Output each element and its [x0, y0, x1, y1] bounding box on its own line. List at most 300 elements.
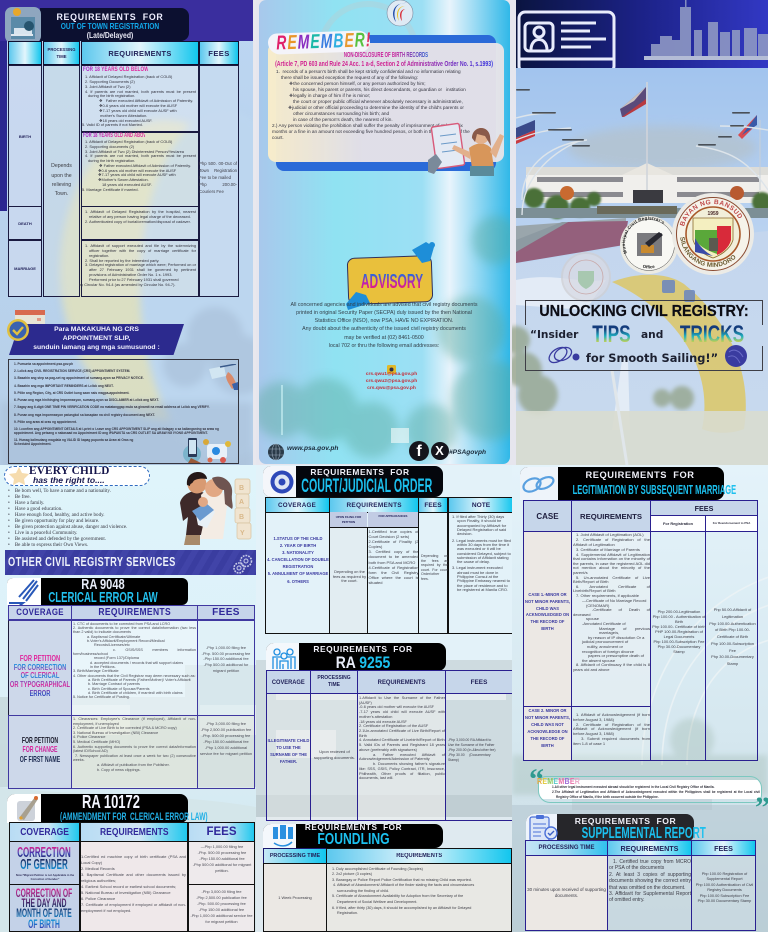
steps text: 11. Huwag kalimutang magdala ng VALID ID kapag pupunta sa Araw at Oras ng: [14, 438, 133, 442]
coverage header: [265, 497, 330, 513]
supplemental header: [526, 814, 694, 842]
panel: out of town registration: [0, 0, 253, 465]
case 2 requirements: 2. Certificate of Registration of the Affidavit of Acknowledgement (if born before August 3, 1988): [573, 722, 650, 736]
correction of gender title: OF GENDER: [20, 857, 68, 873]
case 1 requirements: judicial pronouncement of: [582, 639, 628, 644]
fees text dob: -Php. 500.00 processing fee: [197, 901, 246, 906]
ra 9255 table: [266, 670, 512, 821]
seal: municipal civil registrar office: Office: [642, 264, 654, 268]
remember strip text: 2.The Affidavit of Legitimation and Affidavit of Acknowledgment executed within the Philippines shall be registered at the Local civil Registry Office of Manila, if the birth occurred outside the Philippine.: [552, 790, 760, 799]
petition title first name: OF FIRST NAME: [20, 754, 60, 764]
requirements header: [326, 848, 512, 864]
processing header: [310, 670, 358, 694]
fees text gender: -Php. 500.00 processing fee: [198, 850, 246, 855]
requirements header: [329, 497, 419, 513]
supplemental requirements text: [609, 859, 691, 904]
processing header: PROCESSING TIME: [538, 845, 594, 851]
requirements header: REQUIREMENTS: [346, 502, 402, 508]
coverage header: [9, 822, 80, 842]
banner: appointment slip: [9, 324, 184, 355]
requirements text: 1.Certified ed machine copy of birth certificate (PSA and Local Copy): [81, 854, 186, 865]
text 18 and above: ❖0-6 years old mother will execute the AUSF: [98, 168, 176, 172]
supplemental requirements text: 3. Affidavit for Supplemental Report of omitted entry.: [609, 891, 691, 903]
requirements text clerical: in the Petitions.: [90, 665, 116, 669]
case 1 fees: Php 30.00-Documentary Stamp: [658, 644, 700, 654]
header bar: [40, 8, 189, 41]
text fees: [199, 161, 237, 194]
text fees: Php 200.00-Couriers Fee: [199, 182, 237, 194]
requirements header: REQUIREMENTS: [396, 853, 442, 859]
case 1 requirements: -Certificate of Death of deceased: [573, 607, 650, 617]
foundling requirements text: 6. If filed, after thirty (30) days, it should be accomplished by an Affidavit for Delayed: [332, 906, 471, 910]
tips word: [584, 323, 638, 347]
requirements text first name: 2. Certificate of Live Birth to be corrected (PSA & MCRO copy): [73, 726, 177, 730]
icon: id card: [518, 10, 616, 68]
email addresses: crs.qwu1@psa.gov.ph: [366, 372, 417, 377]
requirements text: 2.1Un-annotated Certificate of Live Birth/Report of Birth: [359, 729, 445, 738]
fees header: FEES: [714, 844, 733, 852]
icon: psa logo: [386, 0, 414, 26]
icon: rope left: [548, 346, 580, 364]
legitimation header: [520, 467, 724, 500]
text under 18: ❖7-17 years old child will execute AUSF with: [99, 108, 177, 113]
appearances subheader: FOR APPEARANCES: [379, 514, 407, 518]
steps text: 5. Piliin ang Region, City, at CRS Outlet kung saan nais magpa-appointment.: [14, 391, 129, 395]
processing header: PROCESSING: [317, 674, 351, 680]
other services title: OTHER CIVIL REGISTRY SERVICES: [8, 555, 176, 569]
correction of gender title: [8, 847, 80, 872]
case 1 requirements: the absent spouse: [582, 658, 615, 663]
fees text first name: -Php 3,000.00 filing fee: [206, 721, 246, 726]
steps text: 1. Pumunta sa appointment.psa.gov.ph: [14, 362, 73, 366]
requirements text: 4. Annotated Certificate of Livebirth/Report of Birth: [359, 738, 445, 742]
illustration: baby blocks: Y: [240, 530, 245, 537]
foundling requirements text: 3. Barangay or Police Report Police Certification that no missing Child was reported.: [332, 878, 472, 882]
banner text: Para MAKAKUHA NG CRS: [54, 326, 139, 333]
requirements text: b. Documents showing father's signature like: SSS, GSIS, Policy Contract, ITR, Insurance, Philhealth, Other proofs of filiation, public documents, last will.: [359, 762, 445, 780]
website: www.psa.gov.ph: [287, 445, 338, 452]
requirements text: a. Father executed Affidavit of Acknowledgement/Admission of Paternity: [359, 753, 445, 761]
processing cell: 1 Week Processing: [278, 895, 312, 900]
steps text: 2. I-click ang CIVIL REGISTRATION SERVICE (CRS) APPOINTMENT SYSTEM.: [14, 369, 130, 373]
requirements text first name: [73, 717, 196, 772]
panel: cover photo: [512, 0, 768, 465]
other services band: [5, 550, 256, 575]
ra 9048 title: RA 9048: [81, 576, 125, 593]
fees header: [188, 822, 255, 842]
note header: [448, 497, 514, 513]
fees dob cell: [188, 884, 255, 932]
body text: other circumstances surrounding his birth; and: [293, 111, 389, 116]
gender note: Note:*Migrant Petition is not Applicable in the Correction of Gender.*: [16, 874, 74, 881]
insider word: “Insider: [530, 329, 578, 341]
correction of dob title: OF BIRTH: [28, 917, 60, 931]
appearances subheader: [368, 512, 418, 527]
processing header: [525, 840, 608, 856]
remember strip text: 1.All other legal instrument executed abroad should be registered in the Local Civil Registry Office of Manila.: [552, 785, 714, 789]
requirements header: [80, 822, 188, 842]
icon: calendar: [15, 310, 45, 324]
requirements text clerical: [73, 622, 196, 699]
case 1 requirements: recognition of foreign divorce: [582, 649, 634, 654]
requirements text: 5. Valid IDs of Parents and Registrant 18 years above (preferably with signatures): [359, 743, 445, 752]
case 1 fees: Php 100.00-Subscription Fee: [653, 639, 704, 644]
requirements text clerical: Records/Licenses/etc: [94, 643, 130, 647]
requirements marriage: [81, 240, 199, 297]
case 1 requirements: -Annotated Certificate of: [582, 621, 626, 626]
case 1 requirements: papers or presumptive death of: [588, 653, 644, 658]
note text: 3. Legal instrument executed abroad must be done in Philippine Consul at the Philippine Embassy nearest to the place of residence and to be registered at Manila CRO.: [452, 565, 510, 592]
text marriage: [79, 243, 196, 287]
fees text clerical: -Php. 500.00 processing fee: [202, 651, 250, 656]
processing time value: Depends: [51, 163, 72, 169]
heading article: (Article 7, PD 603 and Rule 24 Acc. 1 a-d, Section 2 of Administrative Order No. 1, s.1993): [275, 59, 493, 68]
icon plate: [263, 824, 296, 848]
coverage list: 3. NATIONALITY: [282, 550, 314, 555]
line one: REQUIREMENTS FOR: [305, 823, 402, 832]
illustration: family: [180, 472, 233, 545]
for registration header: [650, 515, 706, 532]
petition title first name: [9, 736, 71, 764]
requirements header: REQUIREMENTS: [378, 678, 425, 686]
requirements text clerical: 5. Notice for Certificate of Posting.: [73, 695, 130, 699]
top band: [516, 0, 768, 68]
header line two: OUT OF TOWN REGISTRATION: [61, 20, 159, 30]
text under 18: 4. If parents are not married, both parents must be present during the birth registration.: [85, 89, 196, 98]
court order table: [265, 497, 512, 634]
fees text clerical: -Php 1,000.00 filing fee: [206, 645, 246, 650]
text under 18: [82, 74, 196, 127]
line one: REQUIREMENTS FOR: [310, 467, 410, 477]
fees cell: [691, 855, 756, 931]
fees cell 1: [197, 620, 255, 716]
line one: REQUIREMENTS FOR: [575, 816, 676, 826]
coverage gender cell: [9, 841, 80, 885]
icon plate: [526, 814, 557, 842]
requirements header: [607, 840, 692, 856]
requirements text: -0-6 years old mother will execute the AUSF: [359, 705, 434, 709]
seal: bayan ng bansud: BAYAN NG BANSUD: [680, 199, 742, 226]
list of rights: • Have a good education.: [8, 506, 62, 512]
ra 10172 icon plate: [7, 794, 41, 823]
body text: court.: [272, 135, 284, 140]
court order header: [263, 466, 443, 497]
case 1 requirements: by reason of IP dissolution Or a: [588, 635, 644, 640]
requirements cell 2: [71, 715, 198, 789]
header cell fees: FEES: [208, 48, 230, 58]
fees header: [418, 497, 448, 513]
icon: phone and figures: [183, 438, 231, 463]
correction of dob title: [8, 888, 80, 929]
case 1 requirements cell: [571, 531, 651, 707]
petition title clerical: FOR PETITION: [20, 654, 60, 663]
ammendment title: (AMMENDMENT FOR CLERICAL ERROR LAW): [60, 811, 208, 823]
steps text: 10. I-confirm ang APPOINTMENT DETAILS at i-print o i-save ang CRS APPOINTMENT SLIP ang ati ilalagay o sa kailanganing sa araw ng appointment. Ang petsang o nakasaad na Appointment ID ang IPAPAKITA sa CRS OUTLET SA ARAW NG IYONG APPOINTMENT.: [14, 427, 219, 435]
text marriage: 1. Affidavit of support executed and file by the solemnizing officer together with the copy of marriage certificate for registration.: [85, 243, 196, 258]
appearances text: 3. Certified copy of the document to be amended both from PSA and MCRO: [368, 549, 418, 565]
quote mark left: “: [529, 763, 544, 796]
icon: clipboard check: [528, 815, 558, 842]
remember badge: [268, 30, 370, 55]
icon: globe: [268, 444, 284, 460]
banner text: APPOINTMENT SLIP,: [63, 335, 130, 342]
text under 18: 3. Joint Affidavit of Two (2): [85, 84, 130, 89]
icon: seal: [270, 470, 294, 494]
case 1 requirements: —Certificate of No Marriage Record: [582, 598, 646, 603]
requirements text first name: 4. Police Clearance: [73, 735, 106, 739]
petition title clerical: OR TYPOGRAPHICAL: [10, 680, 70, 689]
line two: COURT/JUDICIAL ORDER: [301, 476, 432, 497]
supplemental fees text: Php 30.00 Documentary Stamp: [698, 899, 751, 903]
remember card inner: [268, 43, 504, 162]
requirements cell: [80, 841, 188, 932]
list of rights: • Have enough food, healthy, and active body.: [8, 512, 105, 518]
steps text: [14, 362, 219, 446]
text death: 2. Authenticated copy of burial/cremation/disposal of cadaver.: [85, 219, 191, 224]
coverage list: 2. YEAR OF BIRTH: [280, 543, 316, 548]
case 1 requirements: 2. Certificate of Registration of the Affidavit of Legitimation: [573, 537, 650, 547]
requirements text: 1.Affidavit to Use the Surname of the Father (AUSF): [359, 696, 445, 705]
remember strip text: [552, 785, 760, 800]
line two: RA 9255: [336, 653, 390, 672]
coverage cell 2: [8, 715, 72, 789]
banner text: sunduin lamang ang mga sumusunod :: [33, 344, 160, 351]
correction of dob title: THE DAY AND: [22, 896, 66, 910]
icon plate: [266, 643, 299, 671]
line two: SUPPLEMENTAL REPORT: [582, 825, 706, 842]
petition subheader: PETITION: [342, 520, 355, 524]
panel: legitimation and supplemental: [512, 465, 768, 932]
supplemental requirements text: 1. Certified true copy from MCRO or PSA of the documents: [609, 859, 691, 871]
appearances text: [368, 529, 418, 585]
case 1 reendorsement fees: [708, 607, 757, 668]
clerical error law title: CLERICAL ERROR LAW: [48, 590, 158, 606]
case 1 fees: [652, 610, 706, 655]
header cell processing time: [43, 41, 80, 65]
fees text dob: -Php 150.00 additional fee: [199, 907, 244, 912]
has the right text: has the right to....: [33, 474, 105, 484]
body text: 2.) Any person violating the prohibition shall suffer the penalty of imprisonment of at least six: [272, 123, 463, 128]
title line one: UNLOCKING CIVIL REGISTRY:: [539, 303, 749, 320]
petition title clerical: [4, 655, 76, 699]
icon: x: X: [435, 443, 444, 458]
fees text: -Php 30.00 (Documentary: [448, 753, 491, 757]
body text: months or a fine in an amount not exceeding five hundred pesos, or both in the discretion of the: [272, 129, 470, 134]
petition title clerical: FOR CORRECTION: [14, 663, 66, 672]
fees text: Depending on the fees as required by the court. For court Order/other fees.: [421, 554, 448, 581]
foundling requirements text: [332, 866, 512, 917]
processing time value: relieving: [52, 182, 71, 188]
requirements text: 7. Certificate of employment if employed or affidavit of non-employment if not employed.: [81, 902, 186, 913]
list of rights: • Be given protection against abuse, danger and violence.: [8, 524, 127, 530]
case 1 requirements: nullity, annulment or: [587, 644, 623, 649]
case 1 reendorsement fees: Php 30.00-Documentary Stamp: [711, 654, 754, 666]
ra 9048 header: [7, 578, 188, 605]
text under 18: ❖18 years old executed AUSF.: [99, 118, 152, 123]
ra 10172 title: RA 10172: [82, 792, 140, 812]
line one: REQUIREMENTS FOR: [585, 470, 695, 480]
supplemental table: [525, 840, 758, 931]
petition text: Depending on the fees as required by the court.: [333, 569, 366, 583]
requirements text: 2. Certificate of Registration of the AUSF: [359, 724, 428, 728]
correction of gender title: CORRECTION: [17, 845, 71, 861]
tips word: TIPS: [592, 321, 631, 348]
fees text: Stamp): [448, 758, 459, 762]
correction of dob title: CORRECTION OF: [16, 886, 72, 900]
steps text: 7. Ilagay ang 6-digit ONE TIME PIN VERIFICATION CODE na matatanggap mula sa ginamit na email address at i-click ang VERIFY.: [14, 405, 209, 409]
fees text first name: [199, 721, 253, 757]
text under 18: ❖0-6 years old mother will execute the AUSF: [99, 103, 177, 108]
fees text clerical: [199, 645, 253, 674]
text 18 and above: 18 years old executed AUSF.: [102, 182, 152, 187]
icon: hand writing: [209, 364, 238, 390]
fees text gender: [190, 844, 254, 874]
illegitimate text: ILLEGITIMATE CHILD TO USE THE SURNAME OF THE FATHER.: [268, 738, 309, 764]
processing time value: [43, 65, 80, 297]
table: [8, 41, 239, 297]
coverage header: COVERAGE: [272, 678, 305, 686]
foundling header: [263, 824, 443, 848]
seal: bayan ng bansud: [672, 193, 754, 275]
case 1 requirements: 3. Certificate of Marriage of Parents: [576, 547, 640, 552]
text 18 and above: ❖ Father executed Affidavit of Admission of Paternity.: [99, 163, 191, 168]
steps box: [8, 359, 239, 464]
panel: every child and clerical error: [0, 465, 256, 932]
foundling requirements text: Registration.: [337, 911, 358, 915]
death label: DEATH: [18, 220, 32, 226]
header cell processing time: TIME: [56, 54, 66, 59]
icon: gears: [233, 554, 252, 574]
fees gender cell: [188, 841, 255, 885]
header cell blank: [8, 41, 42, 65]
icon: building and hand: [272, 824, 294, 848]
ra 9255 header: [266, 643, 446, 671]
case 2 text: CASE 2. MINOR OR NOT MINOR PARENTS, CHILD WAS NOT ACKNOWLEDGE ON THE RECORD OF BIRTH: [525, 708, 570, 748]
case 2 requirements: 3. Submit required documents from item 1-8 of case 1: [573, 736, 650, 746]
icon: family: [271, 645, 297, 671]
and word: and: [641, 329, 663, 341]
ra 9048 table: [8, 605, 255, 789]
requirements cell: [326, 863, 512, 932]
list of rights: • Be born well, To have a name and a nationality.: [8, 488, 111, 494]
death label: [8, 206, 42, 240]
fees header: FEES: [695, 504, 713, 512]
coverage cell: [265, 512, 330, 634]
fees text clerical: -Php 500.00 additional for migrant petition: [204, 662, 248, 673]
body text: his spouse, his parent or parents, his direct descendants, or guardian or institution: [293, 87, 466, 92]
fees text gender: —Php 1,000.00 filing fee: [201, 844, 243, 849]
icon: email: [387, 365, 396, 374]
case 1 requirements: 8. Affidavit of Continuacy if the child is 8 years old and above: [573, 662, 650, 672]
text 18 and above: 2. Supporting documents (2): [85, 144, 134, 149]
title box bottom bracket: [525, 346, 763, 371]
header cell requirements: REQUIREMENTS: [108, 48, 172, 58]
text 18 and above: 4. If parents are not married, both parents must be present during the birth registration.: [85, 153, 196, 163]
advisory text: Any doubt about the authenticity of the issued civil registry documents: [302, 326, 466, 332]
body text: [272, 69, 470, 140]
requirements text first name: b. Copy of news clippings.: [97, 768, 141, 772]
remember small heading: REMEMBER: [537, 776, 580, 786]
body text: ❖legally in charge of him if he is minor;: [289, 93, 370, 98]
title line three: for Smooth Sailing!”: [586, 351, 718, 365]
text under 18: 5. Valid ID of parents if not Married.: [82, 122, 143, 127]
line one: REQUIREMENTS FOR: [313, 644, 413, 654]
text marriage: Performed prior to 27 February 1931 shall governed: [89, 277, 179, 282]
body text: there shall be issued exception the request of any of the following:: [281, 75, 418, 80]
icon: check badge: [7, 319, 29, 341]
case header: [523, 500, 572, 532]
for reendorsement header: [705, 515, 758, 532]
processing text: Upon recieved of supporting documents.: [314, 749, 355, 760]
steps text: 4. Basahin ang mga IMPORTANT REMINDERS at i-click ang NEXT.: [14, 384, 114, 388]
foundling requirements text: Department of Social Welfare and Development.: [337, 900, 417, 904]
text 18 and above: 5. Marriage Certificate if married.: [82, 186, 139, 192]
supplemental fees text: Php 100.00 Registration of Supplemental Report: [702, 872, 747, 881]
birth label: BIRTH: [19, 134, 31, 138]
text marriage: 3. Delayed registration of marriage which were; Performed on or after 27 February 1931 shall be governed by pertinent provisions of Administrative Order No. 1 s. 1993.: [85, 262, 196, 277]
foundling requirements text: 1. Duly accomplished Certificate of Founding (3copies): [332, 866, 423, 870]
advisory text: All concerned agencies and individuals are advised that civil registry documents: [291, 302, 477, 308]
petition sub cell: [329, 527, 368, 634]
icon: star: [9, 467, 29, 485]
text death: 1. Affidavit of Delayed Registration by the hospital, nearest relative of any person having legal charge of the deceased.: [85, 209, 196, 219]
marriage label: MARRIAGE: [14, 266, 36, 271]
advisory text: printed in original Security Paper (SECPA) duly issued by the then National: [296, 310, 472, 316]
appearances text: 1.Certified true copies of Court Decision (2 sets): [368, 529, 418, 539]
for registration header: For Registration: [663, 521, 693, 526]
case 1 reendorsement fees: Php 50.00-Affidavit of Legitimation: [714, 607, 751, 619]
appearances text: 2.Certificate of Finality (2 Copies): [368, 539, 418, 549]
body text: in case of the person's death, the nearest of kin.: [293, 117, 393, 122]
text under 18: 1. Affidavit of Delayed Registration (back of COLB): [85, 74, 172, 79]
processing cell: [263, 863, 327, 932]
processing cell: [310, 693, 358, 821]
text under 18: mother's Sworn Attestation.: [100, 113, 147, 118]
note text: 2. Legal instruments must be filed within 30 days from the time it was executed or it will be considered Delayed, subject to submission of Affidavit stating the cause of delay.: [452, 538, 511, 564]
case 1 requirements: 4. Supplemental Affidavit of Legitimation that contains information on the minority of the parents, in case the registered AOL did not mention about the minority of the parent/s: [573, 552, 650, 575]
appearances text: 4.Certificate of Registration form the Civil Registry Office where the court is situated: [368, 565, 418, 585]
steps text: 9. Piliin ang araw at oras ng appointment.: [14, 420, 77, 424]
requirements text clerical: d. accepted documents / records that will support claims: [90, 661, 183, 665]
supplemental fees text: Php 100.00 Subscription Fee: [700, 894, 749, 898]
icon: facebook: [409, 441, 429, 461]
illustration: baby blocks: B: [239, 514, 244, 521]
case 1 requirements: Marriage of previous marriage/s,: [599, 626, 650, 635]
supplemental requirements text: 2. At least 3 copies of supporting documents showing the correct entry that was omitted on the document.: [609, 872, 691, 891]
case 1 requirements: 6. Annotated Certificate of Livebirth/Report of Birth: [573, 584, 650, 593]
coverage cell: [266, 693, 311, 821]
header cell processing time: PROCESSING: [48, 47, 75, 52]
illustration: baby blocks: [234, 478, 252, 540]
heading under 18: FOR 18 YEARS OLD BELOW: [83, 66, 149, 73]
requirements header: REQUIREMENTS: [98, 607, 171, 618]
requirements birth under 18: [81, 65, 199, 132]
fees text dob: -Php 1,000.00 additional service fee for migrant petition: [190, 913, 253, 924]
foundling requirements text: surrounding the finding of child.: [337, 889, 389, 893]
fees text gender: -Php 150.00 additional fee: [199, 856, 245, 861]
seal: bayan ng bansud: 1959: [707, 211, 719, 217]
case 1 cell: [523, 531, 572, 707]
text 18 and above: 1. Affidavit of Delayed Registration (back of COLB): [85, 139, 172, 144]
ra 10172 header: [7, 794, 188, 823]
header line three: (Late/Delayed): [87, 30, 133, 40]
social handle: #PSAgovph: [449, 449, 486, 456]
coverage header: COVERAGE: [20, 826, 69, 838]
list of rights: • Be free.: [8, 494, 31, 500]
coverage list: [267, 535, 329, 585]
requirements text clerical: d. Birth Certificate of children, if married/ with birth claims: [88, 691, 183, 695]
requirements text: [81, 854, 186, 914]
